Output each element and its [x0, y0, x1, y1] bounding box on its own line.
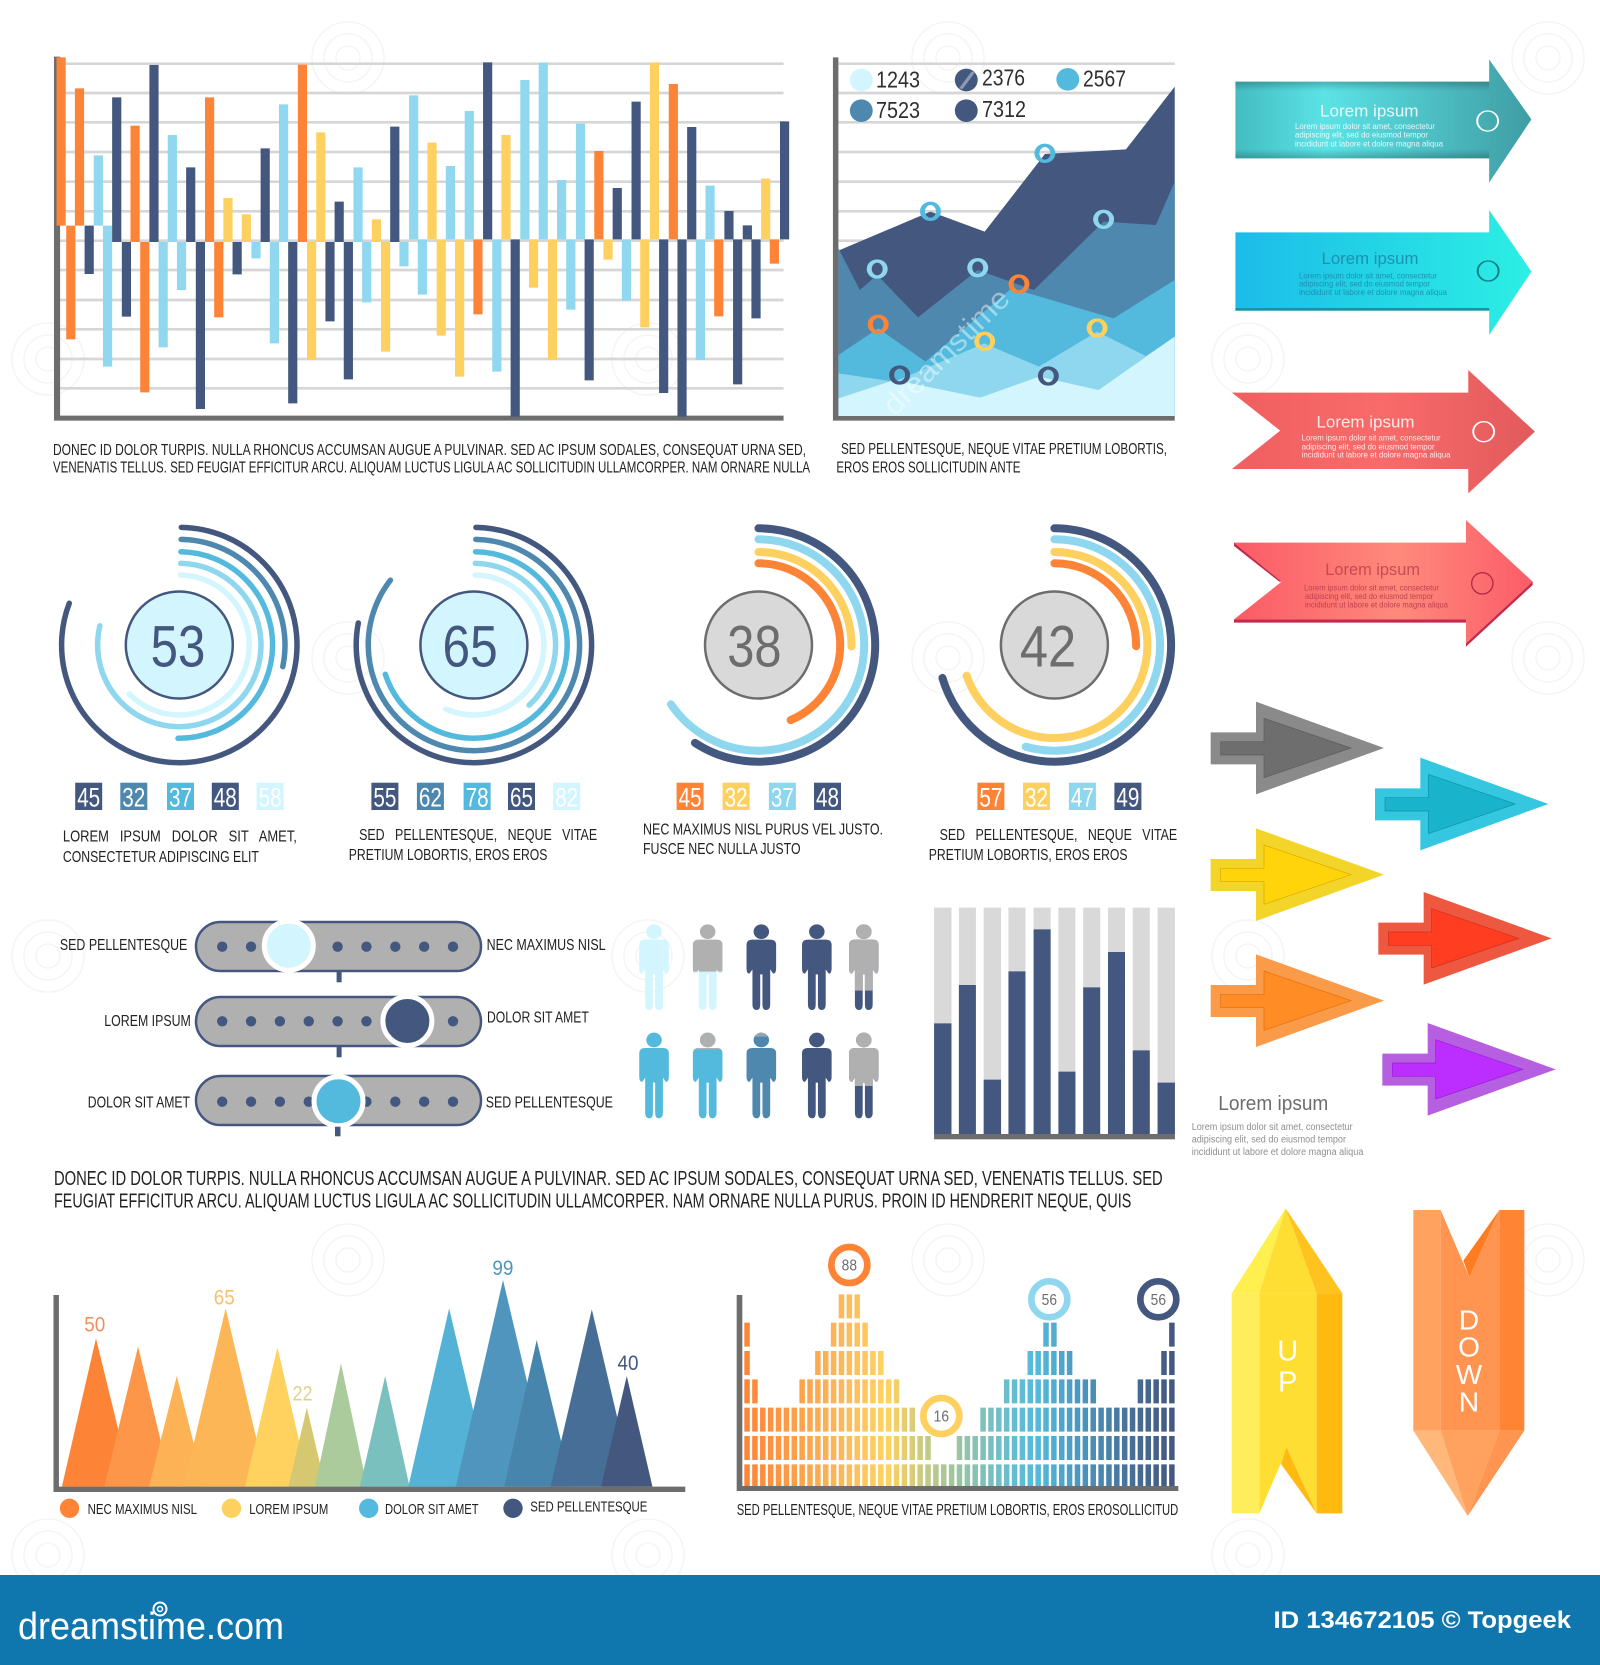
arrow banner: cyan: incididunt ut labore et dolore magna aliqua	[1299, 288, 1448, 297]
badge 56 navy: 56	[1151, 1292, 1166, 1309]
mountain chart legend: NEC MAXIMUS NISL	[88, 1501, 197, 1518]
up arrow ribbon	[1232, 1208, 1342, 1513]
legend values: 2567	[1083, 66, 1126, 92]
caption: gauge 65: PRETIUM LOBORTIS, EROS EROS	[349, 847, 547, 864]
mountain chart values: 99	[492, 1257, 513, 1280]
badge 56 navy	[1140, 1281, 1176, 1317]
brand logo: dreamstime.com	[18, 1606, 284, 1648]
arrow: grey	[1211, 702, 1384, 794]
arrow banner: teal: Lorem ipsum dolor sit amet, consectetur	[1295, 122, 1435, 131]
caption: area chart	[836, 441, 1167, 476]
mountain chart legend: LOREM IPSUM	[249, 1501, 328, 1518]
mountain triangle chart	[53, 1280, 685, 1492]
caption: gauge 42: PRETIUM LOBORTIS, EROS EROS	[929, 847, 1128, 864]
value tiles: gauge 53: 37	[169, 783, 192, 813]
down arrow ribbon: N	[1459, 1387, 1479, 1418]
caption: gauge 65	[349, 827, 597, 864]
down arrow ribbon: D	[1459, 1304, 1479, 1335]
arrow banner: cyan: Lorem ipsum	[1322, 249, 1418, 268]
radial gauge 65	[354, 525, 594, 765]
arrow: orange	[1211, 954, 1384, 1047]
value tiles: gauge 65: 78	[466, 783, 489, 813]
mountain chart values	[84, 1257, 638, 1406]
paragraph: DONEC ID DOLOR TURPIS. NULLA RHONCUS ACCUMSAN AUGUE A PULVINAR. SED AC IPSUM SODALES, CONSEQUAT URNA SED, VENENATIS TELLUS. SED	[54, 1168, 1163, 1190]
badge 88	[831, 1247, 867, 1283]
caption: segmented chart: SED PELLENTESQUE, NEQUE VITAE PRETIUM LOBORTIS, EROS EROSOLLICITUD	[737, 1502, 1178, 1519]
value tiles: gauge 53: 48	[214, 783, 237, 813]
arrow banner: red: adipiscing elit, sed do eiusmod tempor	[1302, 442, 1435, 451]
slider labels: SED PELLENTESQUE	[60, 937, 187, 954]
badge 16: 16	[934, 1409, 949, 1426]
caption: area chart: EROS EROS SOLLICITUDIN ANTE	[836, 459, 1020, 476]
paragraph: FEUGIAT EFFICITUR ARCU. ALIQUAM LUCTUS LIGULA AC SOLLICITUDIN ULLAMCORPER. NAM ORNARE NULLA PURUS. PROIN ID HENDRERIT NEQUE, QUIS	[54, 1191, 1131, 1213]
value tiles: gauge 38: 37	[771, 783, 794, 813]
value tiles: gauge 65: 55	[373, 783, 396, 813]
arrow banner: cyan	[1235, 210, 1531, 335]
slider 3	[196, 1076, 481, 1136]
radial gauge 38: 38	[727, 615, 782, 680]
radial gauge 65: 65	[442, 615, 498, 680]
stacked bar chart	[934, 908, 1175, 1139]
caption: gauge 53: LOREM IPSUM DOLOR SIT AMET,	[63, 829, 297, 846]
arrow banner: red: Lorem ipsum	[1316, 412, 1414, 431]
value tiles: gauge 42: 47	[1071, 783, 1094, 813]
value tiles: gauge 53	[75, 783, 284, 813]
arrow banner: cyan: adipiscing elit, sed do eiusmod tempor	[1299, 280, 1430, 289]
arrow: purple	[1382, 1023, 1556, 1116]
badge 56 light	[1031, 1281, 1067, 1317]
value tiles: gauge 42	[977, 783, 1141, 813]
slider labels: LOREM IPSUM	[104, 1013, 191, 1030]
value tiles: gauge 42: 57	[979, 783, 1002, 813]
data point markers	[869, 145, 1112, 384]
paragraph	[54, 1168, 1163, 1213]
three-dimensional pointer arrows	[1211, 702, 1556, 1116]
slider 2	[196, 996, 481, 1057]
arrow banner: teal: adipiscing elit, sed do eiusmod tempor	[1295, 131, 1428, 140]
value tiles: gauge 38: 45	[679, 783, 702, 813]
value tiles: gauge 38	[677, 783, 841, 813]
mountain chart legend	[60, 1499, 647, 1518]
arrow banner: coral: Lorem ipsum dolor sit amet, consectetur	[1304, 584, 1439, 593]
down arrow ribbon: O	[1458, 1332, 1480, 1363]
caption: gauge 42	[929, 827, 1177, 864]
value tiles: gauge 42: 32	[1025, 783, 1048, 813]
caption: gauge 65: SED PELLENTESQUE, NEQUE VITAE	[359, 827, 597, 844]
grey text block: Lorem ipsum	[1218, 1093, 1328, 1115]
arrow banner: coral: Lorem ipsum	[1325, 560, 1420, 579]
arrow: yellow	[1211, 828, 1384, 921]
arrow banner: coral: adipiscing elit, sed do eiusmod tempor	[1305, 592, 1434, 601]
footer bar	[0, 1575, 1600, 1665]
mountain chart values: 65	[214, 1286, 235, 1309]
value tiles: gauge 65: 65	[510, 783, 533, 813]
badge 88: 88	[842, 1258, 857, 1275]
slider labels: SED PELLENTESQUE	[486, 1094, 613, 1111]
diverging bar chart	[54, 57, 785, 421]
caption: bar chart	[53, 442, 810, 477]
caption: gauge 53	[63, 829, 297, 866]
grey text block: incididunt ut labore et dolore magna aliqua	[1192, 1147, 1364, 1158]
caption: bar chart: DONEC ID DOLOR TURPIS. NULLA RHONCUS ACCUMSAN AUGUE A PULVINAR. SED AC IPSUM SODALES, CONSEQUAT URNA SED,	[53, 442, 806, 459]
watermark over area chart: dreamstime	[877, 282, 1017, 422]
up arrow ribbon: P	[1278, 1367, 1297, 1399]
mountain chart legend: DOLOR SIT AMET	[385, 1501, 479, 1518]
grey text block: Lorem ipsum dolor sit amet, consectetur	[1192, 1122, 1353, 1133]
slider 1	[196, 921, 481, 982]
caption: gauge 38: NEC MAXIMUS NISL PURUS VEL JUSTO.	[643, 821, 883, 838]
slider labels: DOLOR SIT AMET	[487, 1010, 589, 1027]
badge 16	[923, 1398, 959, 1434]
down arrow ribbon	[1413, 1210, 1524, 1516]
value tiles: gauge 53: 58	[259, 783, 282, 813]
radial gauge 53: 53	[151, 615, 205, 680]
slider labels	[60, 937, 613, 1111]
arrow banner: teal: Lorem ipsum	[1320, 102, 1418, 121]
arrow banner: red: Lorem ipsum dolor sit amet, consectetur	[1302, 434, 1441, 443]
radial gauge 42: 42	[1020, 615, 1076, 680]
mountain chart values: 40	[618, 1352, 638, 1375]
value tiles: gauge 38: 32	[725, 783, 748, 813]
value tiles: gauge 42: 49	[1116, 783, 1139, 813]
radial gauge 42	[938, 528, 1171, 762]
arrow banner: cyan: Lorem ipsum dolor sit amet, consectetur	[1299, 271, 1437, 280]
caption: gauge 38: FUSCE NEC NULLA JUSTO	[643, 841, 801, 858]
arrow banner: red: incididunt ut labore et dolore magna aliqua	[1302, 451, 1451, 460]
grey text block: adipiscing elit, sed do eiusmod tempor	[1192, 1135, 1347, 1146]
grey text block	[1192, 1093, 1364, 1158]
arrow banner: teal	[1235, 59, 1531, 183]
slider labels: NEC MAXIMUS NISL	[487, 937, 606, 954]
up arrow ribbon: U	[1277, 1336, 1298, 1368]
mountain chart values: 50	[84, 1314, 105, 1337]
value tiles: gauge 53: 32	[122, 783, 145, 813]
caption: area chart: SED PELLENTESQUE, NEQUE VITAE PRETIUM LOBORTIS,	[841, 441, 1167, 458]
legend values	[876, 64, 1126, 123]
arrow banner: coral: incididunt ut labore et dolore magna aliqua	[1305, 601, 1449, 610]
arrow: red	[1378, 892, 1552, 985]
legend values: 2376	[982, 64, 1025, 90]
value tiles: gauge 65: 82	[555, 783, 578, 813]
arrow banner: coral	[1234, 520, 1533, 647]
mountain chart values: 22	[292, 1383, 312, 1406]
legend values: 7312	[982, 96, 1026, 122]
caption: bar chart: VENENATIS TELLUS. SED FEUGIAT EFFICITUR ARCU. ALIQUAM LUCTUS LIGULA AC SOLLICITUDIN ULLAMCORPER. NAM ORNARE NULLA	[53, 460, 810, 477]
caption: gauge 42: SED PELLENTESQUE, NEQUE VITAE	[940, 827, 1177, 844]
arrow banner: red	[1232, 370, 1535, 493]
value tiles: gauge 53: 45	[77, 783, 100, 813]
segmented bar chart	[737, 1247, 1178, 1491]
down arrow ribbon: W	[1456, 1359, 1483, 1390]
mountain chart legend: SED PELLENTESQUE	[530, 1499, 647, 1516]
value tiles: gauge 65: 62	[419, 783, 442, 813]
legend values: 7523	[876, 97, 920, 123]
badge 56 light: 56	[1042, 1292, 1057, 1309]
image id: ID 134672105 © Topgeek	[1274, 1607, 1572, 1634]
radial gauge 53	[60, 525, 299, 765]
caption: gauge 53: CONSECTETUR ADIPISCING ELIT	[63, 849, 259, 866]
people pictogram grid	[639, 924, 879, 1118]
arrow banner: teal: incididunt ut labore et dolore magna aliqua	[1295, 139, 1444, 148]
value tiles: gauge 38: 48	[816, 783, 839, 813]
arrow: teal	[1375, 758, 1548, 850]
value tiles: gauge 65	[371, 783, 580, 813]
stacked area chart	[833, 57, 1175, 421]
legend dots	[850, 68, 1079, 122]
slider labels: DOLOR SIT AMET	[88, 1094, 190, 1111]
legend values: 1243	[876, 66, 920, 92]
radial gauge 38	[642, 528, 875, 762]
caption: gauge 38	[643, 821, 883, 858]
